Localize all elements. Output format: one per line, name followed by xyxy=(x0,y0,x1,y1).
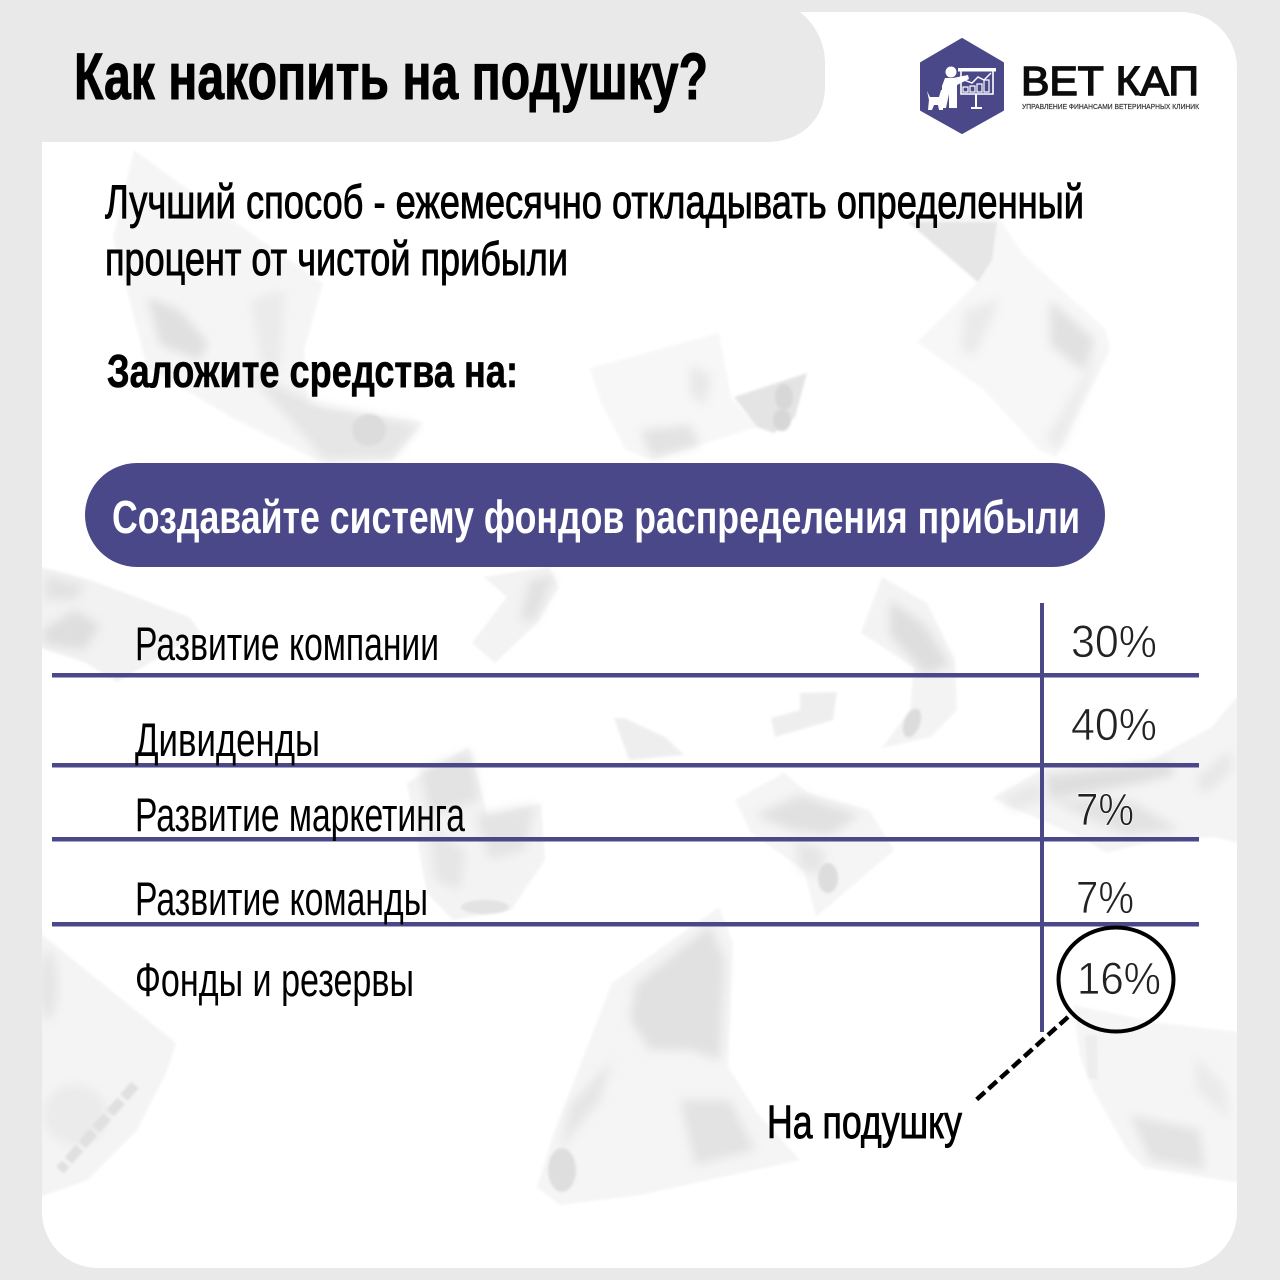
row: marketing development: 7% xyxy=(1076,784,1134,835)
banknote: centre top xyxy=(630,354,807,460)
intro text: процент от чистой прибыли xyxy=(105,232,568,285)
title tab xyxy=(0,0,1280,142)
row: team development: 7% xyxy=(1076,872,1134,923)
background: falling banknotes xyxy=(38,150,1240,1205)
banknote: top left xyxy=(113,150,423,463)
row: dividends xyxy=(135,699,1157,766)
table: profit distribution xyxy=(52,603,1199,1032)
callout circle around 16% xyxy=(1058,928,1174,1032)
logo: ВЕТ КАП xyxy=(921,39,1200,133)
banknote: small fragments xyxy=(614,692,837,760)
row: marketing development xyxy=(135,784,1134,841)
row: team development: Развитие команды xyxy=(135,872,428,925)
banknote: centre right curved xyxy=(861,577,957,748)
row: dividends: 40% xyxy=(1071,699,1157,750)
row: team development xyxy=(135,872,1134,925)
logo tagline: УПРАВЛЕНИЕ ФИНАНСАМИ ВЕТЕРИНАРНЫХ КЛИНИК xyxy=(1022,102,1200,111)
banknote: left edge xyxy=(40,567,201,682)
banknote: lower centre left xyxy=(407,747,545,920)
banknote: lower centre right xyxy=(735,773,894,917)
banknote: bottom right xyxy=(1073,1005,1240,1183)
title: Как накопить на подушку? xyxy=(74,39,708,113)
callout label: На подушку xyxy=(767,1096,962,1148)
row: company development: 30% xyxy=(1071,616,1157,667)
banknote: top right xyxy=(908,215,1110,457)
banner: profit distribution funds xyxy=(85,463,1105,567)
logo wordmark: ВЕТ КАП xyxy=(1021,58,1199,104)
row: funds and reserves: 16% xyxy=(1077,953,1161,1004)
row: marketing development: Развитие маркетинга xyxy=(135,788,466,841)
banknote: centre small xyxy=(472,567,559,663)
row: company development xyxy=(135,616,1157,670)
row: funds and reserves: Фонды и резервы xyxy=(135,953,414,1006)
subheading: Заложите средства на: xyxy=(107,345,518,397)
banknote: bottom centre xyxy=(537,907,800,1205)
icon: hexagon with vet presenter xyxy=(921,39,1003,133)
row: funds and reserves xyxy=(135,953,1161,1006)
banknote: right edge xyxy=(992,693,1240,853)
intro text xyxy=(105,175,1084,285)
callout dashed line xyxy=(975,1017,1068,1101)
row: dividends: Дивиденды xyxy=(135,713,320,766)
banknote: bottom left xyxy=(38,933,176,1197)
row: company development: Развитие компании xyxy=(135,617,439,670)
